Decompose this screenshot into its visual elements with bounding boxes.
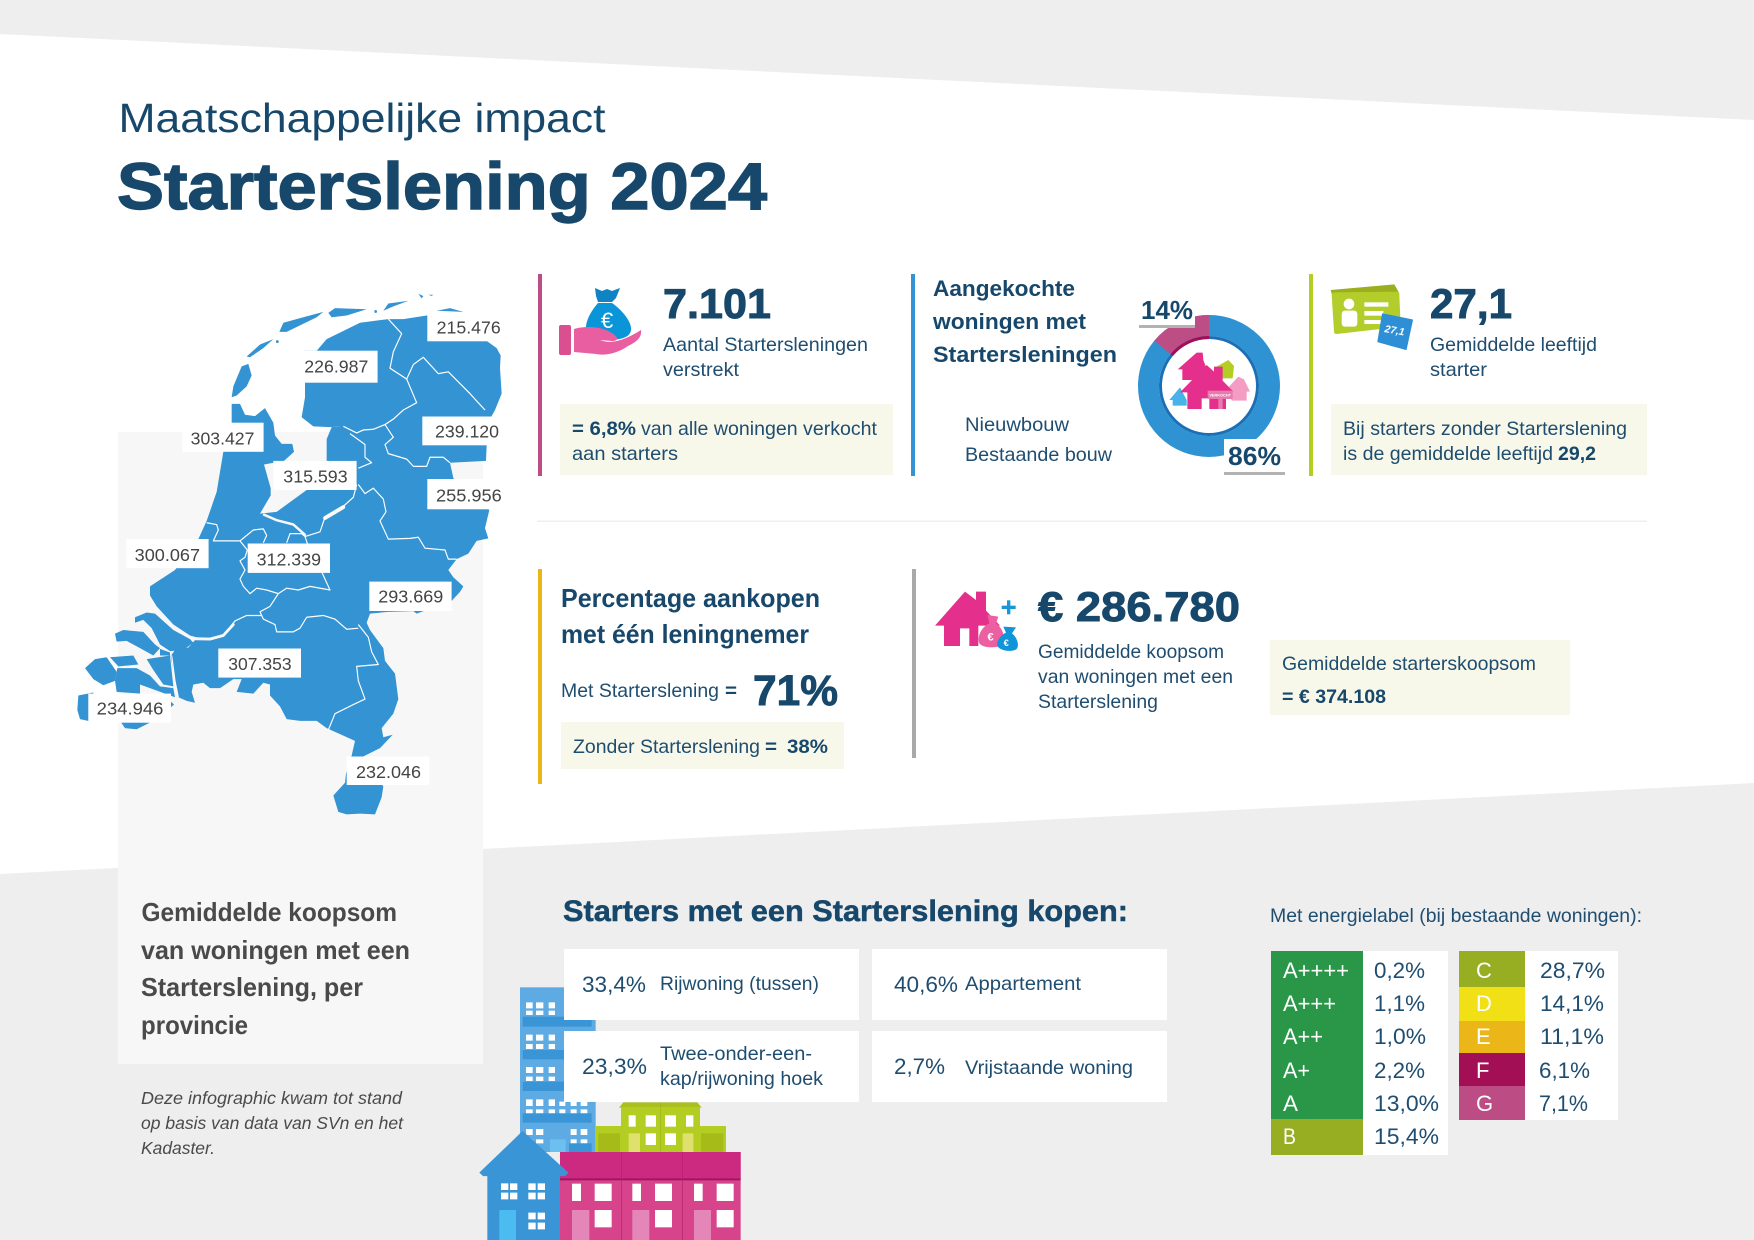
icon: roze rijtjeshuizen (560, 1152, 741, 1240)
heading: gemiddelde koopsom per provincie (141, 897, 410, 1040)
illustration: gebouwen (480, 987, 741, 1240)
map labels: 232.046 (356, 762, 421, 782)
table: energielabels A tot B: 1,0% (1374, 1024, 1426, 1049)
map labels: 307.353 (228, 654, 292, 674)
map labels: 215.476 (437, 318, 501, 338)
icon: huis met geldzakken (935, 592, 1018, 651)
heading: gemiddelde koopsom per provincie: Starterslening, per (141, 972, 363, 1002)
callout: zonder starterslening: = (765, 736, 777, 758)
card: twee-onder-een-kap: 23,3% (582, 1054, 647, 1079)
panel: gemiddelde leeftijd (1309, 274, 1647, 476)
callout: leeftijd zonder starterslening: Bij starters zonder Starterslening (1343, 418, 1627, 440)
icon: groen gebouw (595, 1102, 726, 1152)
icon: huis met geldzakken: € (1004, 638, 1010, 648)
panel: woningtypen (564, 949, 1167, 1102)
table: energielabels A tot B: 15,4% (1374, 1124, 1439, 1149)
title (117, 95, 767, 223)
icon: ID-kaart: 27,1 (1383, 324, 1406, 338)
panel: aantal startersleningen (538, 274, 893, 476)
table: energielabels C tot G: F (1476, 1058, 1489, 1083)
panel: aantal startersleningen: verstrekt (663, 359, 740, 381)
table: energielabels C tot G: 11,1% (1540, 1024, 1604, 1049)
panel: aantal startersleningen: Aantal Startersleningen (663, 334, 868, 356)
heading: gemiddelde koopsom per provincie: van woningen met een (141, 935, 410, 965)
map labels: 303.427 (191, 428, 254, 448)
card: twee-onder-een-kap: kap/rijwoning hoek (660, 1068, 823, 1090)
card: vrijstaande woning: Vrijstaande woning (965, 1057, 1133, 1079)
icon: huizen (1169, 353, 1250, 409)
card: rijwoning tussen (564, 949, 859, 1020)
text block: bronvermelding: Deze infographic kwam tot stand (141, 1088, 403, 1108)
icon: hand met geldzak: € (601, 308, 613, 333)
map labels: 234.946 (97, 699, 163, 719)
panel: gemiddelde koopsom (912, 569, 1570, 758)
table: energielabels A tot B: 1,1% (1374, 991, 1425, 1016)
heading: aangekochte woningen (932, 276, 1117, 367)
callout: zonder starterslening: 38% (787, 736, 828, 758)
table: energielabels C tot G: G (1476, 1091, 1493, 1116)
map labels: 293.669 (378, 587, 443, 607)
text block: bronvermelding (141, 1088, 404, 1158)
table: energielabels C tot G: 7,1% (1539, 1091, 1588, 1116)
callout: leeftijd zonder starterslening: 29,2 (1558, 443, 1596, 465)
callout: zonder starterslening: Zonder Starterslening (573, 736, 760, 758)
callout: zonder starterslening (561, 722, 844, 769)
text block: bronvermelding: Kadaster. (141, 1138, 215, 1158)
table: energielabels A tot B (1271, 951, 1448, 1155)
callout: 6,8%: = 6,8% (572, 418, 636, 440)
callout: gemiddelde starterskoopsom (1270, 640, 1570, 715)
table: energielabels A tot B: A++++ (1283, 958, 1349, 983)
callout: 6,8%: aan starters (572, 443, 678, 465)
donut chart (1139, 293, 1285, 475)
callout: leeftijd zonder starterslening: is de gemiddelde leeftijd (1343, 443, 1553, 465)
table: energielabels C tot G: 14,1% (1540, 991, 1604, 1016)
table: energielabels C tot G: D (1476, 991, 1492, 1016)
legend: bouwtype: Nieuwbouw (965, 414, 1070, 436)
table: energielabels A tot B: 13,0% (1374, 1091, 1439, 1116)
label: 86%: 86% (1228, 441, 1281, 471)
heading: gemiddelde koopsom per provincie: provincie (141, 1010, 248, 1040)
card: vrijstaande woning: 2,7% (894, 1054, 945, 1079)
table: energielabels C tot G: E (1476, 1024, 1491, 1049)
panel: percentage aankopen met een leningnemer: = (725, 680, 737, 702)
panel: gemiddelde leeftijd: starter (1430, 359, 1488, 381)
icon: huizen: VERKOCHT (1209, 394, 1232, 398)
callout: leeftijd zonder starterslening (1331, 404, 1647, 475)
map: provinciegrenzen (172, 319, 485, 730)
heading: aangekochte woningen: Startersleningen (933, 342, 1117, 367)
panel: gemiddelde leeftijd: Gemiddelde leeftijd (1430, 334, 1597, 356)
icon: zeeuwse eilanden (77, 613, 193, 729)
panel: gemiddelde koopsom: € 286.780 (1038, 583, 1240, 630)
card: appartement: Appartement (965, 973, 1082, 995)
panel: percentage aankopen met een leningnemer: Met Starterslening (561, 680, 719, 702)
panel: gemiddelde koopsom: van woningen met een (1038, 666, 1233, 688)
card: twee-onder-een-kap: Twee-onder-een- (660, 1043, 812, 1065)
title: Starterslening 2024 (117, 149, 767, 223)
table: energielabels C tot G: 28,7% (1540, 958, 1605, 983)
icon: blauw huis (480, 1132, 568, 1240)
legend: bouwtype (965, 414, 1113, 466)
legend: bouwtype: Bestaande bouw (965, 444, 1113, 466)
card: appartement: 40,6% (894, 972, 958, 997)
panel: aantal startersleningen: 7.101 (663, 280, 771, 327)
title: Maatschappelijke impact (118, 95, 606, 141)
card: twee-onder-een-kap (564, 1031, 859, 1102)
callout: gemiddelde starterskoopsom: Gemiddelde starterskoopsom (1282, 653, 1536, 675)
heading: aangekochte woningen: woningen met (932, 309, 1087, 334)
card: vrijstaande woning (872, 1031, 1167, 1102)
panel: percentage aankopen met een leningnemer (538, 569, 844, 784)
map: gemiddelde koopsom per provincie (77, 294, 506, 814)
panel: map background (118, 432, 483, 1064)
table: energielabels A tot B: A++ (1283, 1024, 1323, 1049)
icon: hand met geldzak (559, 288, 641, 355)
panel: aangekochte woningen (911, 274, 1285, 476)
table: energielabels A tot B: B (1283, 1124, 1296, 1149)
table: energielabels A tot B: 2,2% (1374, 1058, 1425, 1083)
panel: gemiddelde leeftijd: 27,1 (1430, 280, 1512, 327)
heading: aangekochte woningen: Aangekochte (933, 276, 1075, 301)
panel: percentage aankopen met een leningnemer: 71% (753, 667, 838, 715)
table: energielabels C tot G: C (1476, 958, 1492, 983)
icon: huis met geldzakken: € (987, 632, 994, 644)
heading: energielabel: Met energielabel (bij bestaande woningen): (1270, 905, 1642, 927)
card: appartement (872, 949, 1167, 1020)
heading: percentage aankopen (561, 583, 820, 649)
heading: starters kopen: Starters met een Starterslening kopen: (563, 895, 1128, 928)
panel: gemiddelde koopsom: Gemiddelde koopsom (1038, 641, 1224, 663)
callout: gemiddelde starterskoopsom: = € 374.108 (1282, 686, 1386, 708)
icon: waddeneilanden (232, 294, 463, 397)
callout: 6,8%: van alle woningen verkocht (641, 418, 878, 440)
callout: 6,8% (560, 404, 893, 475)
map labels: 255.956 (436, 486, 502, 506)
icon: ID-kaart (1331, 284, 1412, 349)
table: energielabels A tot B: 0,2% (1374, 958, 1425, 983)
text block: bronvermelding: op basis van data van SVn en het (141, 1113, 404, 1133)
label: 14%: 14% (1141, 295, 1193, 325)
heading: gemiddelde koopsom per provincie: Gemiddelde koopsom (142, 897, 397, 927)
table: energielabels A tot B: A+++ (1283, 991, 1336, 1016)
map labels (88, 314, 506, 785)
heading: percentage aankopen: Percentage aankopen (561, 583, 820, 613)
map labels: 239.120 (435, 421, 499, 441)
table: energielabels C tot G (1459, 951, 1618, 1120)
map labels: 312.339 (257, 550, 321, 570)
icon: flatgebouw (520, 987, 596, 1152)
heading: percentage aankopen: met één leningnemer (561, 619, 809, 649)
map labels: 226.987 (304, 356, 368, 376)
panel: gemiddelde koopsom: Starterslening (1038, 691, 1158, 713)
table: energielabels A tot B: A+ (1283, 1058, 1310, 1083)
table: energielabels C tot G: 6,1% (1539, 1058, 1590, 1083)
card: rijwoning tussen: Rijwoning (tussen) (660, 973, 819, 995)
map labels: 300.067 (135, 545, 200, 565)
table: energielabels A tot B: A (1283, 1091, 1298, 1116)
card: rijwoning tussen: 33,4% (582, 972, 646, 997)
map labels: 315.593 (283, 467, 348, 487)
